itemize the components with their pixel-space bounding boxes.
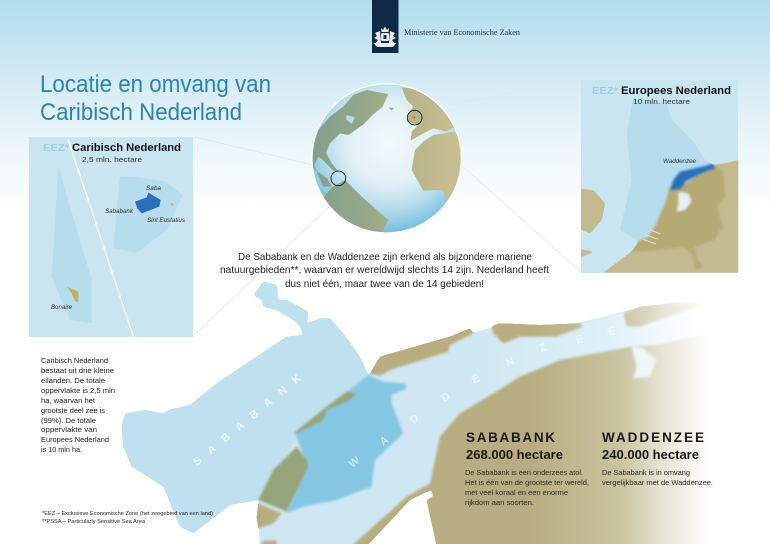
text block: Caribisch Nederland: Europees Nederland — [41, 435, 109, 444]
EEZ areas Caribbean map — [52, 140, 183, 337]
text block: Caribisch Nederland — [41, 356, 115, 454]
logo: Rijksoverheid — [372, 0, 398, 53]
big comparison map — [122, 282, 770, 544]
title — [40, 71, 271, 126]
text block: Caribisch Nederland: oppervlakte van — [41, 425, 97, 434]
text block: Caribisch Nederland: bestaat uit drie kleine — [41, 366, 114, 375]
text block: Waddenzee: WADDENZEE — [602, 430, 704, 445]
overlap Sababank and Waddenzee — [287, 375, 407, 513]
text block: Waddenzee: 240.000 hectare — [602, 448, 699, 462]
text block: Caribisch Nederland: Caribisch Nederland — [41, 356, 108, 365]
panel: EEZ Caribisch Nederland — [29, 137, 193, 337]
location markers — [331, 110, 422, 186]
text block: Waddenzee: De Sababank is in omvang — [602, 468, 690, 477]
panel heading: EEZ* — [592, 85, 619, 97]
island labels: Saba — [146, 186, 162, 192]
map label: Sababank: SABABANK — [191, 373, 304, 468]
title: Caribisch Nederland — [40, 99, 242, 126]
connector lines between globe and panels — [193, 81, 581, 336]
island labels: Bonaire — [51, 305, 73, 311]
panel heading — [592, 85, 731, 106]
text block: Sababank: rijkdom aan soorten. — [465, 498, 534, 507]
island labels — [51, 186, 185, 311]
Waddenzee water — [258, 290, 770, 544]
panel heading: EEZ* — [43, 142, 70, 154]
land and islands — [257, 303, 770, 544]
text block: Caribisch Nederland: is 10 mln ha. — [41, 445, 82, 454]
map label: Waddenzee: WADDENZEE — [347, 325, 617, 470]
overlapping land — [258, 392, 357, 512]
panel heading: 2,5 mln. hectare — [82, 155, 142, 164]
panel heading: Europees Nederland — [621, 85, 731, 97]
panel heading: 10 mln. hectare — [633, 97, 690, 106]
background gradient — [0, 0, 770, 210]
globe — [308, 83, 465, 235]
footnotes: *EEZ – Exclusieve Economische Zone (het zeegebied van een land) — [42, 511, 213, 517]
text block: Sababank: met veel koraal en een enorme — [465, 488, 568, 497]
text block: Sababank: SABABANK — [466, 430, 555, 445]
title: Locatie en omvang van — [40, 71, 271, 98]
intro text: dus niet één, maar twee van de 14 gebieden! — [285, 279, 484, 290]
text block: Sababank: 268.000 hectare — [466, 448, 563, 462]
text block: Sababank — [465, 430, 589, 507]
island labels: Sababank — [105, 209, 134, 215]
panel heading: Caribisch Nederland — [72, 142, 181, 154]
ministry name: Ministerie van Economische Zaken — [404, 28, 520, 37]
intro text: natuurgebieden**, waarvan er wereldwijd slechts 14 zijn. Nederland heeft — [220, 265, 549, 276]
icon: coat of arms — [374, 26, 396, 47]
intro text: De Sababank en de Waddenzee zijn erkend als bijzondere mariene — [238, 252, 532, 263]
text block: Caribisch Nederland: eilanden. De totale — [41, 376, 105, 385]
text block: Caribisch Nederland: (99%). De totale — [41, 416, 96, 425]
continents — [308, 87, 465, 235]
text block: Sababank: De Sababank is een onderzees atol. — [465, 468, 583, 477]
text block: Waddenzee: vergelijkbaar met de Waddenzee. — [602, 478, 713, 487]
text block: Sababank: Het is één van de grootste ter wereld, — [465, 478, 589, 487]
map of the Netherlands — [581, 98, 738, 273]
text block: Caribisch Nederland: grootste deel zee is — [41, 406, 105, 415]
Sababank outline — [122, 282, 368, 533]
panel: EEZ Europees Nederland — [581, 80, 738, 273]
panel heading — [43, 142, 181, 164]
text block: Caribisch Nederland: oppervlakte is 2,5 mln — [41, 386, 115, 395]
intro text — [220, 252, 549, 290]
footnotes: **PSSA – Particularly Sensitive Sea Area — [42, 519, 146, 525]
text block: Waddenzee — [602, 430, 713, 487]
text block: Caribisch Nederland: ha, waarvan het — [41, 396, 95, 405]
footnotes — [42, 511, 213, 525]
Waddenzee label: Waddenzee — [663, 159, 697, 165]
island labels: Sint Eustatius — [147, 218, 185, 224]
